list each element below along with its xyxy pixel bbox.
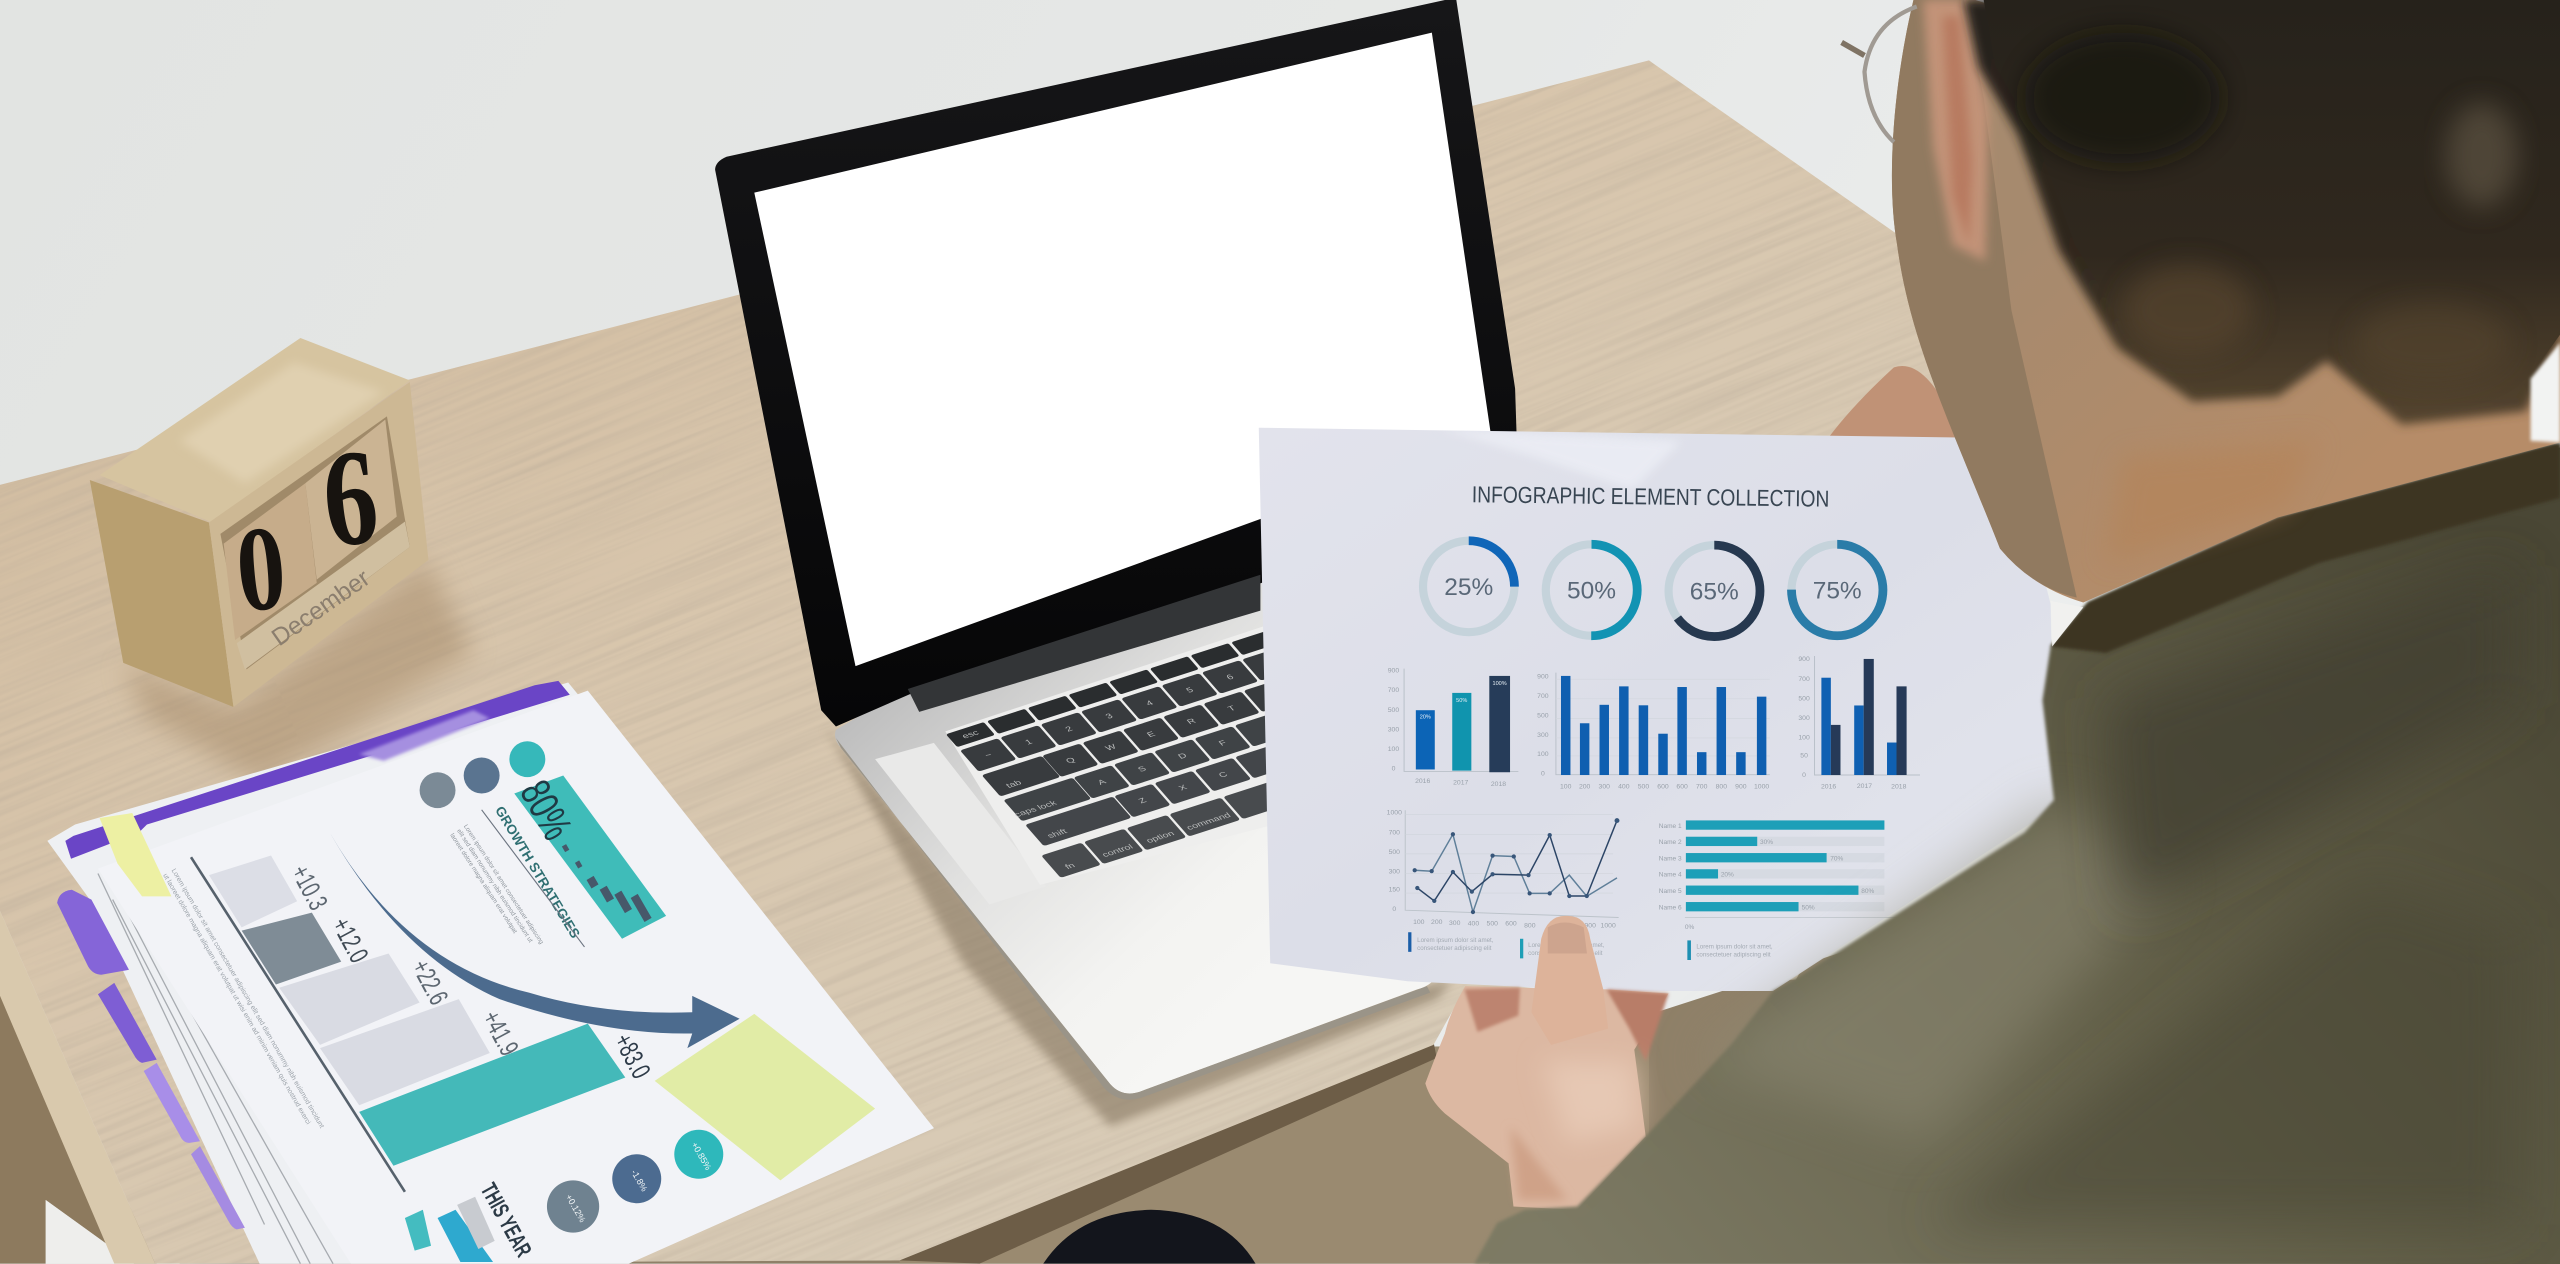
horizontal bar chart: 30% xyxy=(1760,839,1773,846)
bar chart right: 2018 xyxy=(1891,784,1907,791)
key legends: caps lock xyxy=(1012,799,1059,819)
laptop keyboard well xyxy=(945,612,1306,885)
report bar values xyxy=(285,860,657,1083)
key legends: D xyxy=(1176,751,1189,760)
donut 25%: 25% xyxy=(1444,574,1493,601)
legend entry right: Lorem ipsum dolor sit amet, xyxy=(1696,944,1773,951)
bar chart middle: 500 xyxy=(1638,784,1649,791)
key legends xyxy=(947,652,1329,872)
legend entry right xyxy=(1687,940,1773,960)
key legends: W xyxy=(1103,742,1119,752)
key legends: R xyxy=(1185,717,1198,726)
bar chart left: 500 xyxy=(1388,707,1399,714)
report bottom circle stats xyxy=(547,1130,723,1233)
bar chart middle: 600 xyxy=(1676,784,1688,791)
bar chart left: 0 xyxy=(1392,766,1396,773)
man seen from behind xyxy=(1474,0,2560,1264)
key legends: Q xyxy=(1064,756,1077,765)
report bottom circle stats: +0.85% xyxy=(689,1140,713,1172)
key legends: shift xyxy=(1045,827,1069,840)
laptop xyxy=(715,0,1518,1100)
hair lighter patches xyxy=(2024,33,2518,382)
paper crease highlight xyxy=(1480,431,1672,486)
donut 25% xyxy=(1423,541,1514,632)
bar chart middle: 700 xyxy=(1537,693,1549,700)
legend entry left xyxy=(1408,932,1494,952)
key legends: X xyxy=(1177,783,1189,792)
report bar values: +12.0 xyxy=(326,912,375,967)
hair blurred edge xyxy=(1964,0,2560,424)
report bottom circle stats: -1.8% xyxy=(629,1168,650,1193)
ZXCV row xyxy=(1025,732,1332,846)
line chart: 700 xyxy=(1389,829,1400,836)
bar chart left: 100 xyxy=(1388,746,1399,753)
line chart: 150 xyxy=(1389,886,1400,893)
thumb xyxy=(1531,916,1608,1045)
modifier row xyxy=(1041,758,1364,878)
bar chart left: 20% xyxy=(1420,714,1431,720)
key legends: E xyxy=(1145,730,1157,739)
bar chart right: 300 xyxy=(1798,715,1810,722)
key legends: 5 xyxy=(1184,686,1195,694)
report side paragraph: Lorem ipsum dolor sit amet consectetuer adipiscing elit sed diam nonummy nibh euismod tincidunt xyxy=(170,868,325,1130)
line chart: 700 xyxy=(1563,922,1575,929)
paper title: INFOGRAPHIC ELEMENT COLLECTION xyxy=(1472,481,1830,512)
held infographic paper xyxy=(1259,428,2054,991)
desk front edge xyxy=(0,911,155,1264)
report year bars xyxy=(405,1197,495,1262)
neck and head skin xyxy=(1892,0,2560,602)
laptop base xyxy=(835,490,1518,1094)
line chart xyxy=(1387,810,1619,929)
bar chart right: 50 xyxy=(1800,753,1808,760)
big sticky note xyxy=(655,1014,875,1180)
shadow of the laptop xyxy=(824,727,1453,1127)
bar chart left: 700 xyxy=(1388,687,1399,694)
horizontal bar chart: Name 4 xyxy=(1659,872,1682,879)
bar chart middle: 600 xyxy=(1657,784,1669,791)
line chart: 500 xyxy=(1389,849,1400,856)
shirt shading xyxy=(1698,563,2514,1224)
near hand holding the paper xyxy=(1425,916,1669,1210)
line chart: 200 xyxy=(1431,919,1443,926)
bar chart right xyxy=(1798,656,1920,791)
key legends: control xyxy=(1100,843,1135,859)
key legends: 4 xyxy=(1144,699,1155,707)
purple index tab 4 xyxy=(191,1146,245,1229)
report curved arrow xyxy=(330,833,740,1048)
shirt xyxy=(1489,447,2560,1264)
bar chart right: 2016 xyxy=(1821,784,1836,791)
stack side sheets xyxy=(47,682,934,1264)
report bar: +12.0 xyxy=(242,913,341,984)
ear xyxy=(1923,0,1989,261)
bar chart middle: 800 xyxy=(1716,784,1727,791)
key legends: T xyxy=(1226,704,1238,713)
bar chart middle: 400 xyxy=(1618,784,1630,791)
key legends: Z xyxy=(1137,796,1149,805)
desk wood grain xyxy=(0,60,2122,1264)
bar chart left: 100% xyxy=(1492,681,1507,687)
line chart: 500 xyxy=(1487,921,1498,928)
bar chart middle: 300 xyxy=(1599,784,1610,791)
bar chart left: 300 xyxy=(1388,726,1399,733)
legend entry left: consectetuer adipiscing elit xyxy=(1417,945,1492,952)
bar chart middle: 0 xyxy=(1541,771,1545,778)
report 80% value: 80% xyxy=(511,772,581,847)
QWERTY row xyxy=(982,678,1300,797)
laptop lid xyxy=(715,0,1518,727)
bar chart right: 100 xyxy=(1798,735,1810,742)
line chart: 300 xyxy=(1389,868,1400,875)
calendar day digits: 0 xyxy=(231,500,291,637)
horizontal bar chart: 80% xyxy=(1861,888,1874,895)
far hand behind paper xyxy=(1829,366,1959,441)
bar chart right: 900 xyxy=(1798,656,1810,663)
key legends: ~ xyxy=(983,751,994,759)
hair xyxy=(1984,0,2560,408)
donut 75% xyxy=(1792,544,1883,636)
key legends: A xyxy=(1096,777,1109,786)
function row xyxy=(946,630,1280,747)
wooden desk top xyxy=(0,60,2122,1264)
shadow of the calendar xyxy=(122,560,473,784)
horizontal bar chart: Name 6 xyxy=(1659,904,1682,911)
key legends: option xyxy=(1144,829,1176,844)
report bar values: +41.9 xyxy=(476,1005,525,1060)
shirt blurred edge xyxy=(1474,442,2560,1264)
key legends: C xyxy=(1217,770,1230,779)
laptop speaker pad xyxy=(875,743,1046,904)
horizontal bar chart: 50% xyxy=(1802,904,1815,911)
report bar: +22.6 xyxy=(279,953,420,1045)
report side paragraph: ut laoreet dolore magna aliquam erat volutpat ut wisi enim ad minim veniam quis nostrud exerci xyxy=(161,873,312,1126)
horizontal bar chart: Name 3 xyxy=(1659,855,1682,862)
calendar month: December xyxy=(267,565,375,652)
report bar: +41.9 xyxy=(320,999,490,1105)
bar chart middle: 300 xyxy=(1537,732,1549,739)
bar chart middle: 1000 xyxy=(1754,784,1769,791)
key legends: fn xyxy=(1063,861,1077,871)
dark object at the bottom xyxy=(1043,1210,1256,1264)
line chart: 300 xyxy=(1449,920,1461,927)
horizontal bar chart: 0% xyxy=(1685,924,1695,931)
legend entry middle xyxy=(1520,939,1605,958)
laptop blank screen xyxy=(754,33,1491,666)
report bar: +83.0 xyxy=(359,1024,625,1166)
keyboard xyxy=(937,630,1392,878)
donut 50% xyxy=(1546,544,1637,636)
report bar values: +83.0 xyxy=(608,1028,657,1083)
key legends: S xyxy=(1136,765,1148,773)
horizontal bar chart: Name 2 xyxy=(1659,839,1682,846)
jaw shadow xyxy=(1892,0,2077,598)
purple index tab 2 xyxy=(98,983,157,1063)
key legends: esc xyxy=(960,729,981,740)
report bar: +10.3 xyxy=(209,856,297,927)
bar chart middle: 900 xyxy=(1537,673,1549,680)
donut 75%: 75% xyxy=(1813,578,1862,605)
line chart: 900 xyxy=(1584,922,1596,929)
horizontal bar chart: 70% xyxy=(1830,855,1843,862)
horizontal bar chart xyxy=(1659,820,1904,931)
key legends: 2 xyxy=(1063,725,1074,733)
key legends: 1 xyxy=(1023,738,1034,746)
line chart: 1000 xyxy=(1387,810,1402,817)
front report page xyxy=(98,691,934,1264)
bar chart right: 2017 xyxy=(1857,783,1872,790)
key legends: F xyxy=(1217,739,1229,747)
report axis line xyxy=(191,857,405,1192)
stack of papers xyxy=(47,681,934,1264)
glasses xyxy=(1842,7,1917,142)
key legends: 3 xyxy=(1104,712,1115,720)
wooden block calendar: 6 xyxy=(317,419,384,576)
horizontal bar chart: 20% xyxy=(1721,872,1734,879)
line chart: 100 xyxy=(1413,919,1425,926)
report 80% teal card xyxy=(514,776,666,939)
bar chart right: 500 xyxy=(1798,695,1810,702)
line chart: 0 xyxy=(1392,906,1396,913)
bar chart right: 0 xyxy=(1802,772,1806,779)
bar chart middle: 900 xyxy=(1735,784,1747,791)
report strategy paragraph: laoreet dolore magna aliquam erat volutpat xyxy=(448,832,518,935)
under-desk floor and legs xyxy=(0,882,1959,1264)
line chart: 800 xyxy=(1524,922,1536,929)
bar chart left: 2016 xyxy=(1415,778,1430,785)
report this year heading: THIS YEAR xyxy=(475,1179,536,1262)
bar chart middle: 700 xyxy=(1696,784,1708,791)
legend entry middle: consectetuer adipiscing elit xyxy=(1528,950,1603,957)
bar chart middle: 200 xyxy=(1579,784,1591,791)
laptop hinge band xyxy=(908,575,1260,712)
bar chart left: 2017 xyxy=(1453,779,1469,786)
bar chart middle: 500 xyxy=(1537,713,1549,720)
key legends: tab xyxy=(1004,779,1023,789)
bar chart left: 900 xyxy=(1388,668,1399,675)
report small bar icons xyxy=(562,844,652,922)
line chart: 600 xyxy=(1505,921,1517,928)
sheet edge lines xyxy=(98,873,333,1264)
shirt collar xyxy=(2051,442,2560,653)
small sticky flag xyxy=(100,813,171,896)
warm spot on neck xyxy=(2106,441,2318,563)
report growth strategies heading: GROWTH STRATEGIES xyxy=(492,804,583,941)
horizontal bar chart: Name 1 xyxy=(1659,823,1682,830)
legend entry middle: Lorem ipsum dolor sit amet, xyxy=(1528,942,1605,949)
bar chart left xyxy=(1388,668,1518,788)
donut 65% xyxy=(1669,545,1760,637)
legend entry left: Lorem ipsum dolor sit amet, xyxy=(1417,937,1494,944)
horizontal bar chart: Name 5 xyxy=(1659,888,1682,895)
bar chart left: 50% xyxy=(1456,698,1467,704)
report bar values: +22.6 xyxy=(406,954,454,1010)
report top circles xyxy=(420,741,545,808)
report bottom circle stats: +0.12% xyxy=(564,1193,588,1224)
report strategy rule xyxy=(482,810,584,947)
bar chart middle xyxy=(1537,673,1770,791)
bar chart middle: 100 xyxy=(1560,784,1572,791)
purple index tab 1 xyxy=(57,890,129,975)
key legends: command xyxy=(1184,811,1233,831)
bar chart left: 2018 xyxy=(1491,781,1506,788)
number row xyxy=(960,647,1299,772)
wooden block calendar xyxy=(90,338,428,707)
purple divider strip xyxy=(65,681,570,859)
horizontal bar chart: 100% xyxy=(1887,924,1904,931)
donut 50%: 50% xyxy=(1567,578,1616,605)
bar chart right: 700 xyxy=(1798,676,1810,683)
donut 65%: 65% xyxy=(1690,579,1739,606)
report strategy paragraph: elit sed diam nonummy nibh euismod tincidunt ut xyxy=(455,828,534,944)
ASDF row xyxy=(1003,700,1331,821)
report strategy paragraph: Lorem ipsum dolor sit amet consectetuer adipiscing xyxy=(462,823,545,946)
purple index tab 3 xyxy=(144,1063,200,1143)
bar chart middle: 100 xyxy=(1537,751,1549,758)
legend entry right: consectetuer adipiscing elit xyxy=(1696,952,1771,959)
line chart: 400 xyxy=(1468,921,1479,928)
line chart: 1000 xyxy=(1601,922,1616,929)
report bar values: +10.3 xyxy=(285,860,334,915)
bright gap by neck xyxy=(2531,343,2560,442)
gap between paper and collar xyxy=(2051,601,2083,647)
key legends: 6 xyxy=(1224,673,1236,681)
